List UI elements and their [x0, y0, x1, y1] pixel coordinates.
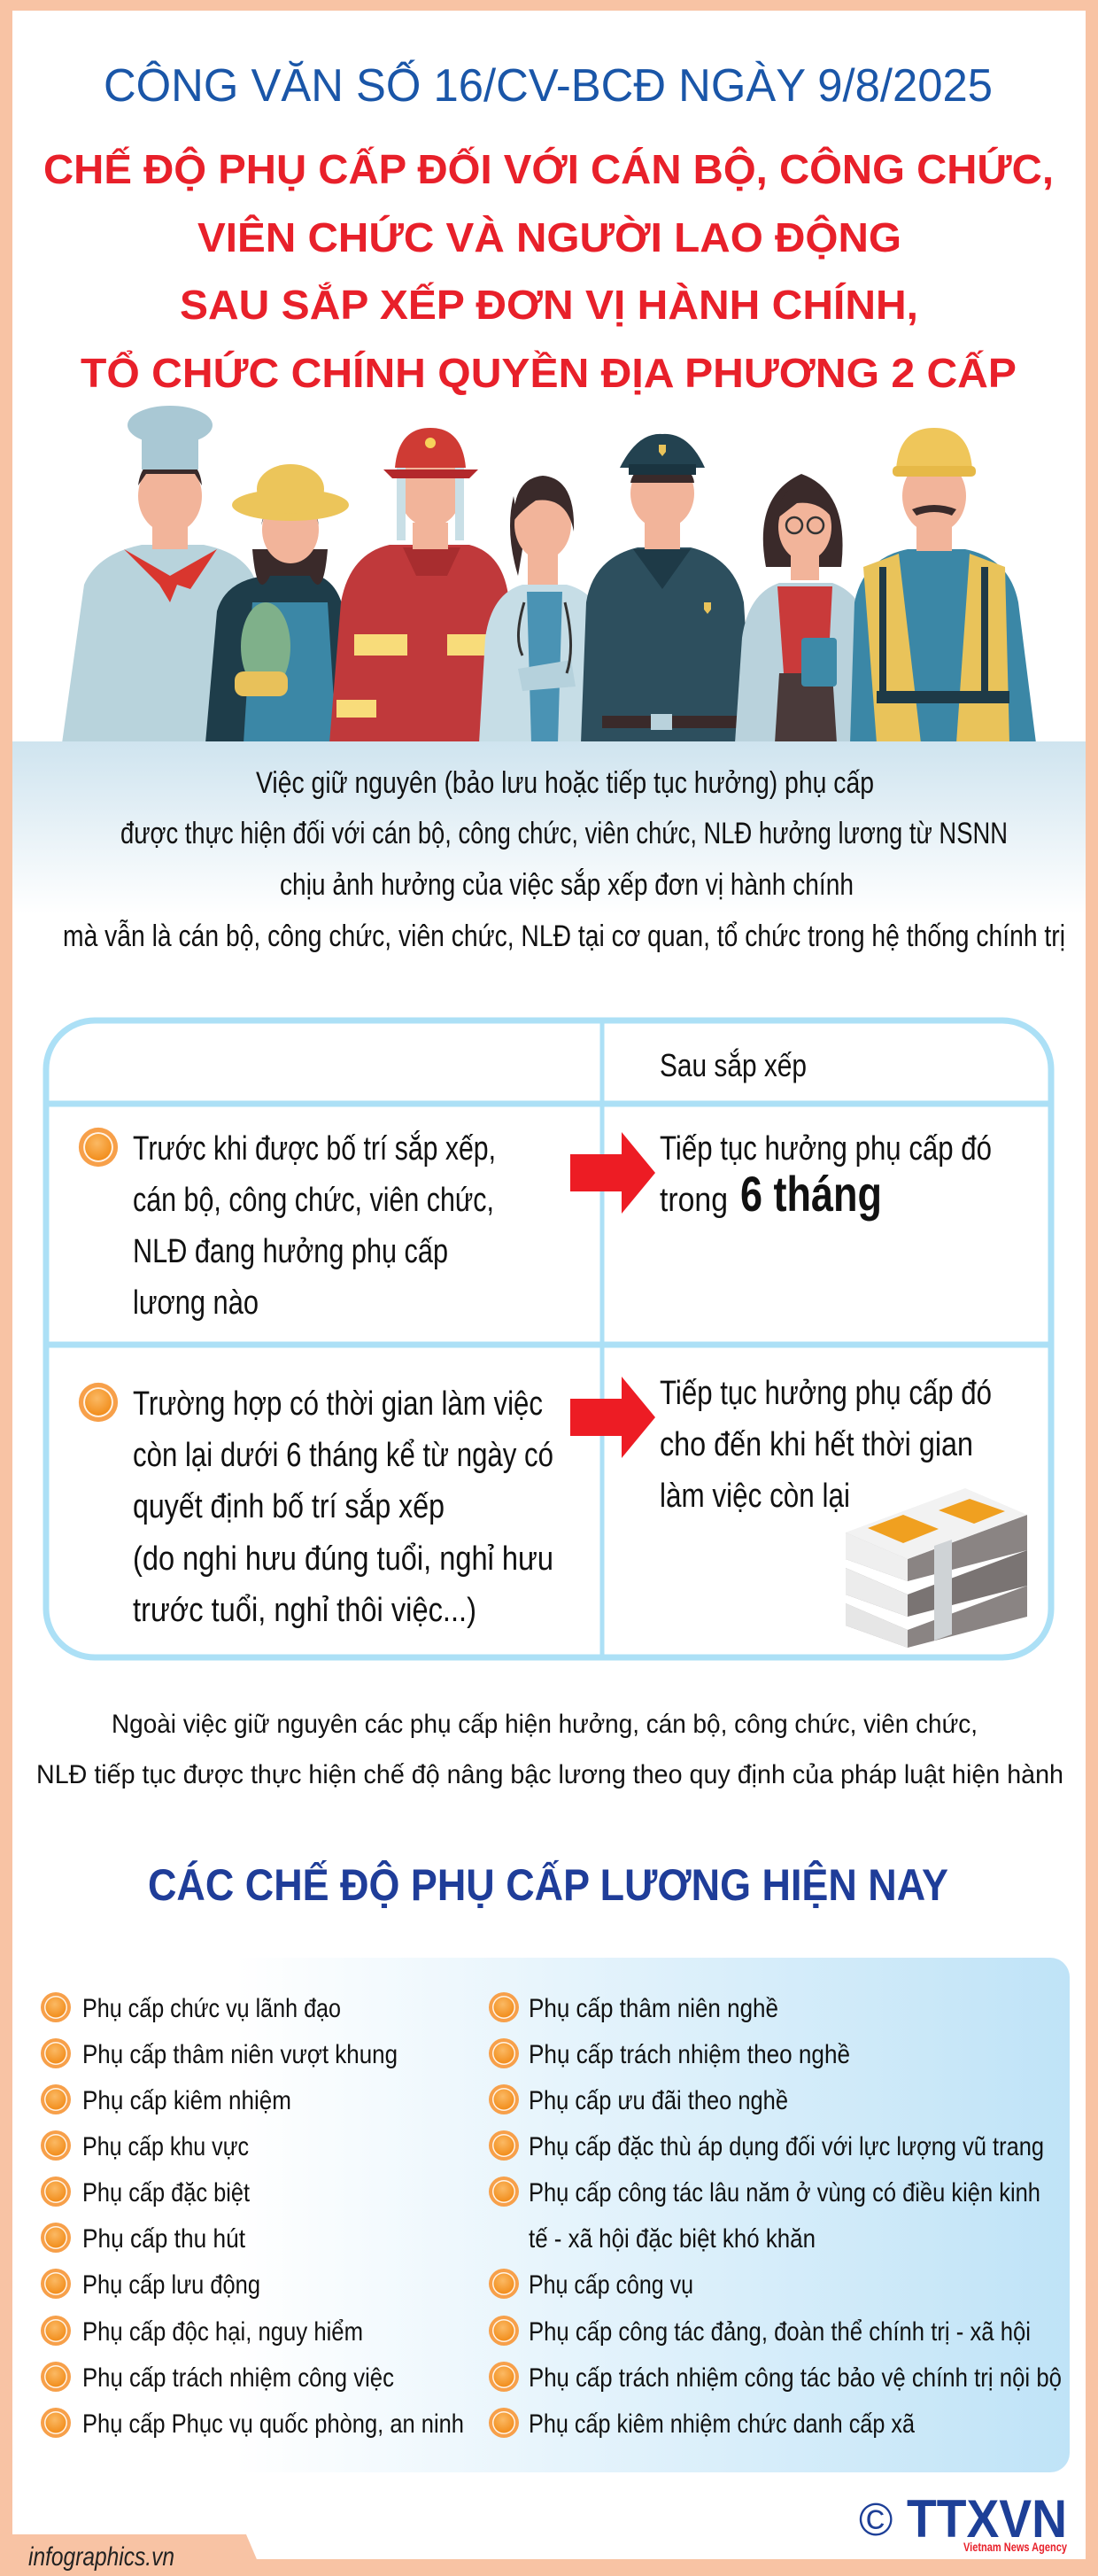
farmer	[205, 464, 349, 743]
row 1 left: lương nào	[133, 1284, 259, 1322]
doctor	[479, 476, 611, 743]
right column: Phụ cấp trách nhiệm theo nghề	[529, 2040, 850, 2069]
right column: Phụ cấp công vụ	[529, 2270, 693, 2300]
woman with glasses	[735, 474, 889, 743]
comparison table	[46, 1020, 1051, 1657]
row 1 right: 6 tháng	[740, 1166, 882, 1222]
table header: Sau sắp xếp	[660, 1047, 807, 1083]
row 1 right	[660, 1130, 992, 1222]
title: TỔ CHỨC CHÍNH QUYỀN ĐỊA PHƯƠNG 2 CẤP	[81, 350, 1017, 396]
left column: Phụ cấp thu hút	[82, 2224, 246, 2254]
right column: Phụ cấp ưu đãi theo nghề	[529, 2086, 788, 2115]
title: CHẾ ĐỘ PHỤ CẤP ĐỐI VỚI CÁN BỘ, CÔNG CHỨC,	[43, 146, 1054, 192]
row 1 left: NLĐ đang hưởng phụ cấp	[133, 1233, 448, 1270]
left column	[41, 1992, 464, 2439]
row 2 left: Trường hợp có thời gian làm việc	[133, 1385, 543, 1423]
police	[581, 434, 753, 743]
row 2 left: trước tuổi, nghỉ thôi việc...)	[133, 1592, 476, 1629]
row 2 right: Tiếp tục hưởng phụ cấp đó	[660, 1375, 992, 1412]
left column: Phụ cấp độc hại, nguy hiểm	[82, 2317, 363, 2347]
row 1 left: cán bộ, công chức, viên chức,	[133, 1182, 494, 1219]
left column: Phụ cấp thâm niên vượt khung	[82, 2040, 398, 2069]
row 2 left: còn lại dưới 6 tháng kể từ ngày có	[133, 1437, 553, 1474]
left column: Phụ cấp kiêm nhiệm	[82, 2086, 291, 2115]
heading: current allowances: CÁC CHẾ ĐỘ PHỤ CẤP LƯƠNG HIỆN NAY	[148, 1859, 948, 1910]
row 2 right	[660, 1375, 992, 1515]
footer: source tab: infographics.vn	[28, 2542, 174, 2572]
right column: Phụ cấp thâm niên nghề	[529, 1994, 778, 2023]
note paragraph: Ngoài việc giữ nguyên các phụ cấp hiện hưởng, cán bộ, công chức, viên chức,	[112, 1710, 978, 1739]
right column	[489, 1992, 1062, 2439]
title: CÔNG VĂN SỐ 16/CV-BCĐ NGÀY 9/8/2025	[104, 59, 993, 112]
row 1 left	[79, 1128, 496, 1322]
worker	[850, 428, 1036, 743]
title	[43, 59, 1054, 396]
row 2 left: quyết định bố trí sắp xếp	[133, 1487, 445, 1525]
firefighter	[329, 428, 512, 743]
logo: TTXVN	[859, 2489, 1067, 2554]
title: SAU SẮP XẾP ĐƠN VỊ HÀNH CHÍNH,	[180, 282, 918, 328]
left column: Phụ cấp đặc biệt	[82, 2178, 251, 2207]
row 1 right: trong	[660, 1182, 728, 1219]
left column: Phụ cấp trách nhiệm công việc	[82, 2363, 394, 2393]
row 2 left: (do nghi hưu đúng tuổi, nghỉ hưu	[133, 1540, 553, 1578]
right column: Phụ cấp công tác đảng, đoàn thể chính trị - xã hội	[529, 2317, 1031, 2347]
chef	[62, 406, 270, 743]
note paragraph: NLĐ tiếp tục được thực hiện chế độ nâng bậc lương theo quy định của pháp luật hiện hành	[36, 1760, 1063, 1789]
row 1 right: Tiếp tục hưởng phụ cấp đó	[660, 1130, 992, 1168]
right column: tế - xã hội đặc biệt khó khăn	[529, 2224, 816, 2254]
row 2 left	[79, 1383, 553, 1629]
left column: Phụ cấp lưu động	[82, 2270, 260, 2300]
arrow 2	[570, 1377, 655, 1458]
intro band: chịu ảnh hưởng của việc sắp xếp đơn vị hành chính	[280, 868, 854, 902]
illustration: workers	[62, 406, 1036, 743]
footer: source tab	[0, 2534, 264, 2576]
left column: Phụ cấp khu vực	[82, 2132, 249, 2161]
note paragraph	[36, 1710, 1063, 1789]
logo: TTXVN: Vietnam News Agency	[963, 2540, 1067, 2554]
panel: allowance list	[27, 1958, 1070, 2472]
arrow 1	[570, 1132, 655, 1214]
row 2 right: làm việc còn lại	[660, 1478, 850, 1515]
intro band	[12, 741, 1086, 953]
left column: Phụ cấp Phục vụ quốc phòng, an ninh	[82, 2409, 464, 2439]
right column: Phụ cấp kiêm nhiệm chức danh cấp xã	[529, 2409, 915, 2439]
title: VIÊN CHỨC VÀ NGƯỜI LAO ĐỘNG	[197, 214, 901, 260]
logo: TTXVN: ©	[859, 2495, 893, 2546]
intro band: Việc giữ nguyên (bảo lưu hoặc tiếp tục hưởng) phụ cấp	[256, 766, 874, 800]
row 2 right: cho đến khi hết thời gian	[660, 1426, 973, 1463]
left column: Phụ cấp chức vụ lãnh đạo	[82, 1994, 341, 2023]
row 1 left: Trước khi được bố trí sắp xếp,	[133, 1129, 496, 1168]
logo: TTXVN: TTXVN	[907, 2489, 1067, 2549]
icon: money stack	[846, 1488, 1027, 1648]
